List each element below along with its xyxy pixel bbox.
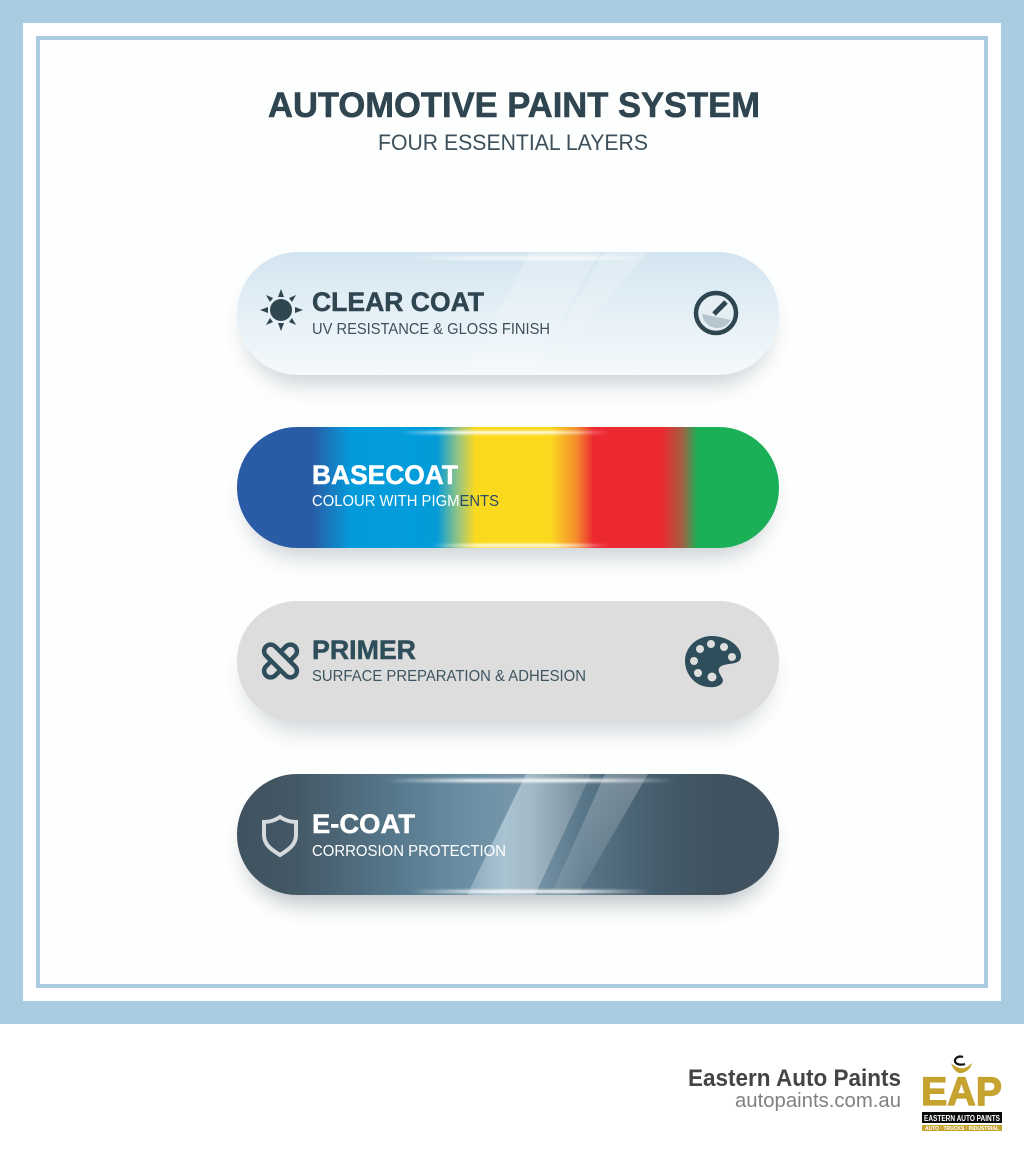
- text: primer description: SURFACE PREPARATION & ADHESION: [312, 668, 586, 685]
- panel: clear coat: [237, 252, 779, 385]
- text: basecoat description: COLOUR WITH PIGMENTS: [312, 493, 499, 510]
- heading: e-coat: E-COAT: [312, 809, 416, 839]
- panel: basecoat: [237, 427, 779, 558]
- icon: gauge: [696, 293, 736, 333]
- heading: basecoat: BASECOAT: [312, 460, 458, 490]
- icon: paint palette: [685, 636, 741, 687]
- logo: EAP: EASTERN AUTO PAINTS: [924, 1114, 1001, 1123]
- logo: EAP: EAP: [921, 1070, 1002, 1114]
- footer: website: autopaints.com.au: [735, 1090, 901, 1112]
- panel: primer: [237, 601, 779, 732]
- text: clear coat description: UV RESISTANCE & GLOSS FINISH: [312, 321, 550, 338]
- icon: shield: [264, 817, 296, 855]
- text: e-coat description: CORROSION PROTECTION: [312, 843, 506, 860]
- title: AUTOMOTIVE PAINT SYSTEM: [268, 86, 760, 125]
- subtitle: FOUR ESSENTIAL LAYERS: [378, 130, 648, 155]
- heading: clear coat: CLEAR COAT: [312, 287, 484, 317]
- heading: primer: PRIMER: [312, 635, 416, 665]
- inner frame line: [38, 38, 986, 986]
- icon: sun: [260, 289, 303, 331]
- icon: crossed bandage: [261, 642, 300, 680]
- footer: company name: Eastern Auto Paints: [688, 1065, 901, 1092]
- logo: EAP: AUTO · TRUCKS · INDUSTRIAL: [925, 1126, 999, 1132]
- panel: e-coat: [237, 774, 779, 905]
- logo: EAP: [921, 1057, 1002, 1132]
